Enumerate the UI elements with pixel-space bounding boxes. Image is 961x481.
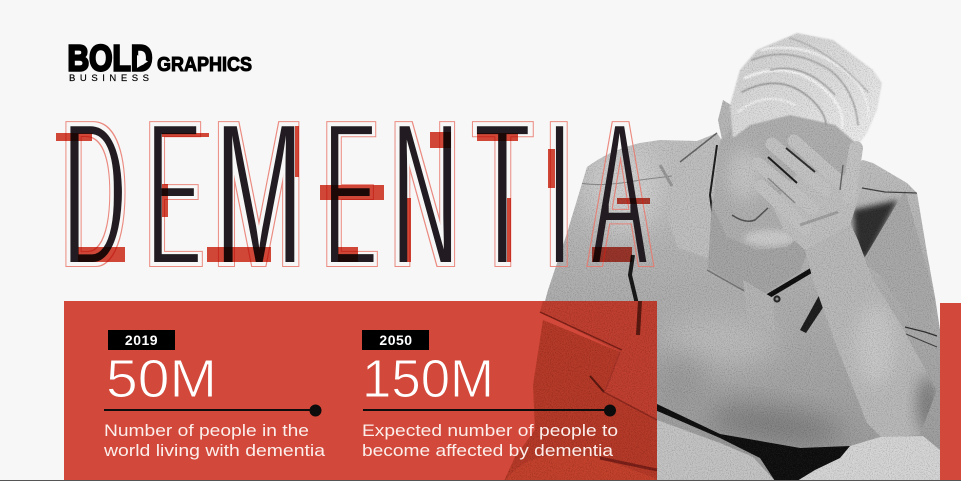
title: DEMENTIA bbox=[63, 77, 648, 311]
timeline 2050 bbox=[363, 404, 616, 416]
year badge 2019: 2019 bbox=[125, 332, 158, 348]
title outline letters: N bbox=[391, 76, 459, 312]
logo word GRAPHICS: GRAPHICS bbox=[157, 53, 252, 76]
title: DEMENTIA: T bbox=[475, 78, 530, 311]
hand bbox=[758, 141, 861, 250]
red accent bars over title bbox=[56, 126, 650, 262]
title outline letters: I bbox=[544, 76, 573, 313]
stat: 2019 bbox=[103, 330, 326, 460]
year badge 2019 bbox=[108, 330, 175, 350]
tinted shirt sleeve bbox=[540, 301, 657, 420]
title: DEMENTIA: M bbox=[215, 78, 303, 311]
description 2019: world living with dementia bbox=[103, 441, 326, 460]
left knee bbox=[657, 420, 774, 480]
sleeve hem bbox=[540, 312, 622, 350]
figure 150M: 150M bbox=[362, 349, 494, 409]
title outline letters: E bbox=[146, 76, 202, 313]
photo section seen through red panel bbox=[504, 301, 657, 481]
shirt bbox=[540, 133, 940, 481]
logo: Bold Business Graphics bbox=[68, 38, 252, 84]
face bbox=[713, 114, 854, 250]
neck and placket bbox=[708, 200, 806, 293]
title outline letters: M bbox=[213, 75, 304, 312]
title outline letters: E bbox=[324, 75, 377, 312]
title: DEMENTIA: E bbox=[325, 78, 377, 311]
tinted arm bbox=[504, 320, 657, 481]
stat: 2050 bbox=[362, 330, 623, 460]
logo play triangle bbox=[137, 55, 148, 68]
description 2050: Expected number of people to bbox=[362, 421, 618, 440]
year badge 2050 bbox=[362, 330, 429, 350]
shadow under torso bbox=[655, 403, 850, 481]
right knee bbox=[797, 436, 940, 481]
title: DEMENTIA: N bbox=[392, 78, 459, 311]
collar bbox=[671, 184, 710, 258]
title outline letters: T bbox=[474, 75, 532, 312]
title: DEMENTIA: I bbox=[549, 78, 570, 311]
forearm bbox=[805, 223, 937, 438]
tinted knee bbox=[505, 455, 657, 481]
description 2019: Number of people in the bbox=[104, 421, 309, 440]
right red bar bbox=[940, 303, 961, 481]
ear bbox=[718, 100, 731, 139]
logo word BUSINESS: BUSINESS bbox=[69, 73, 149, 84]
description 2050: become affected by dementia bbox=[362, 441, 614, 460]
year badge 2050: 2050 bbox=[379, 332, 413, 348]
title outline letters: A bbox=[590, 75, 651, 312]
figure 50M: 50M bbox=[106, 349, 217, 409]
hair bbox=[730, 33, 882, 145]
title outline letters bbox=[62, 75, 651, 313]
logo word BOLD: BOLD bbox=[68, 38, 152, 78]
title: DEMENTIA: D bbox=[63, 77, 126, 310]
title outline letters: D bbox=[62, 76, 126, 313]
photo: older man holding his head bbox=[540, 33, 940, 481]
red panel bbox=[64, 301, 657, 481]
title: DEMENTIA: E bbox=[148, 77, 201, 311]
title: DEMENTIA: A bbox=[591, 77, 648, 311]
timeline 2019 bbox=[104, 404, 322, 416]
